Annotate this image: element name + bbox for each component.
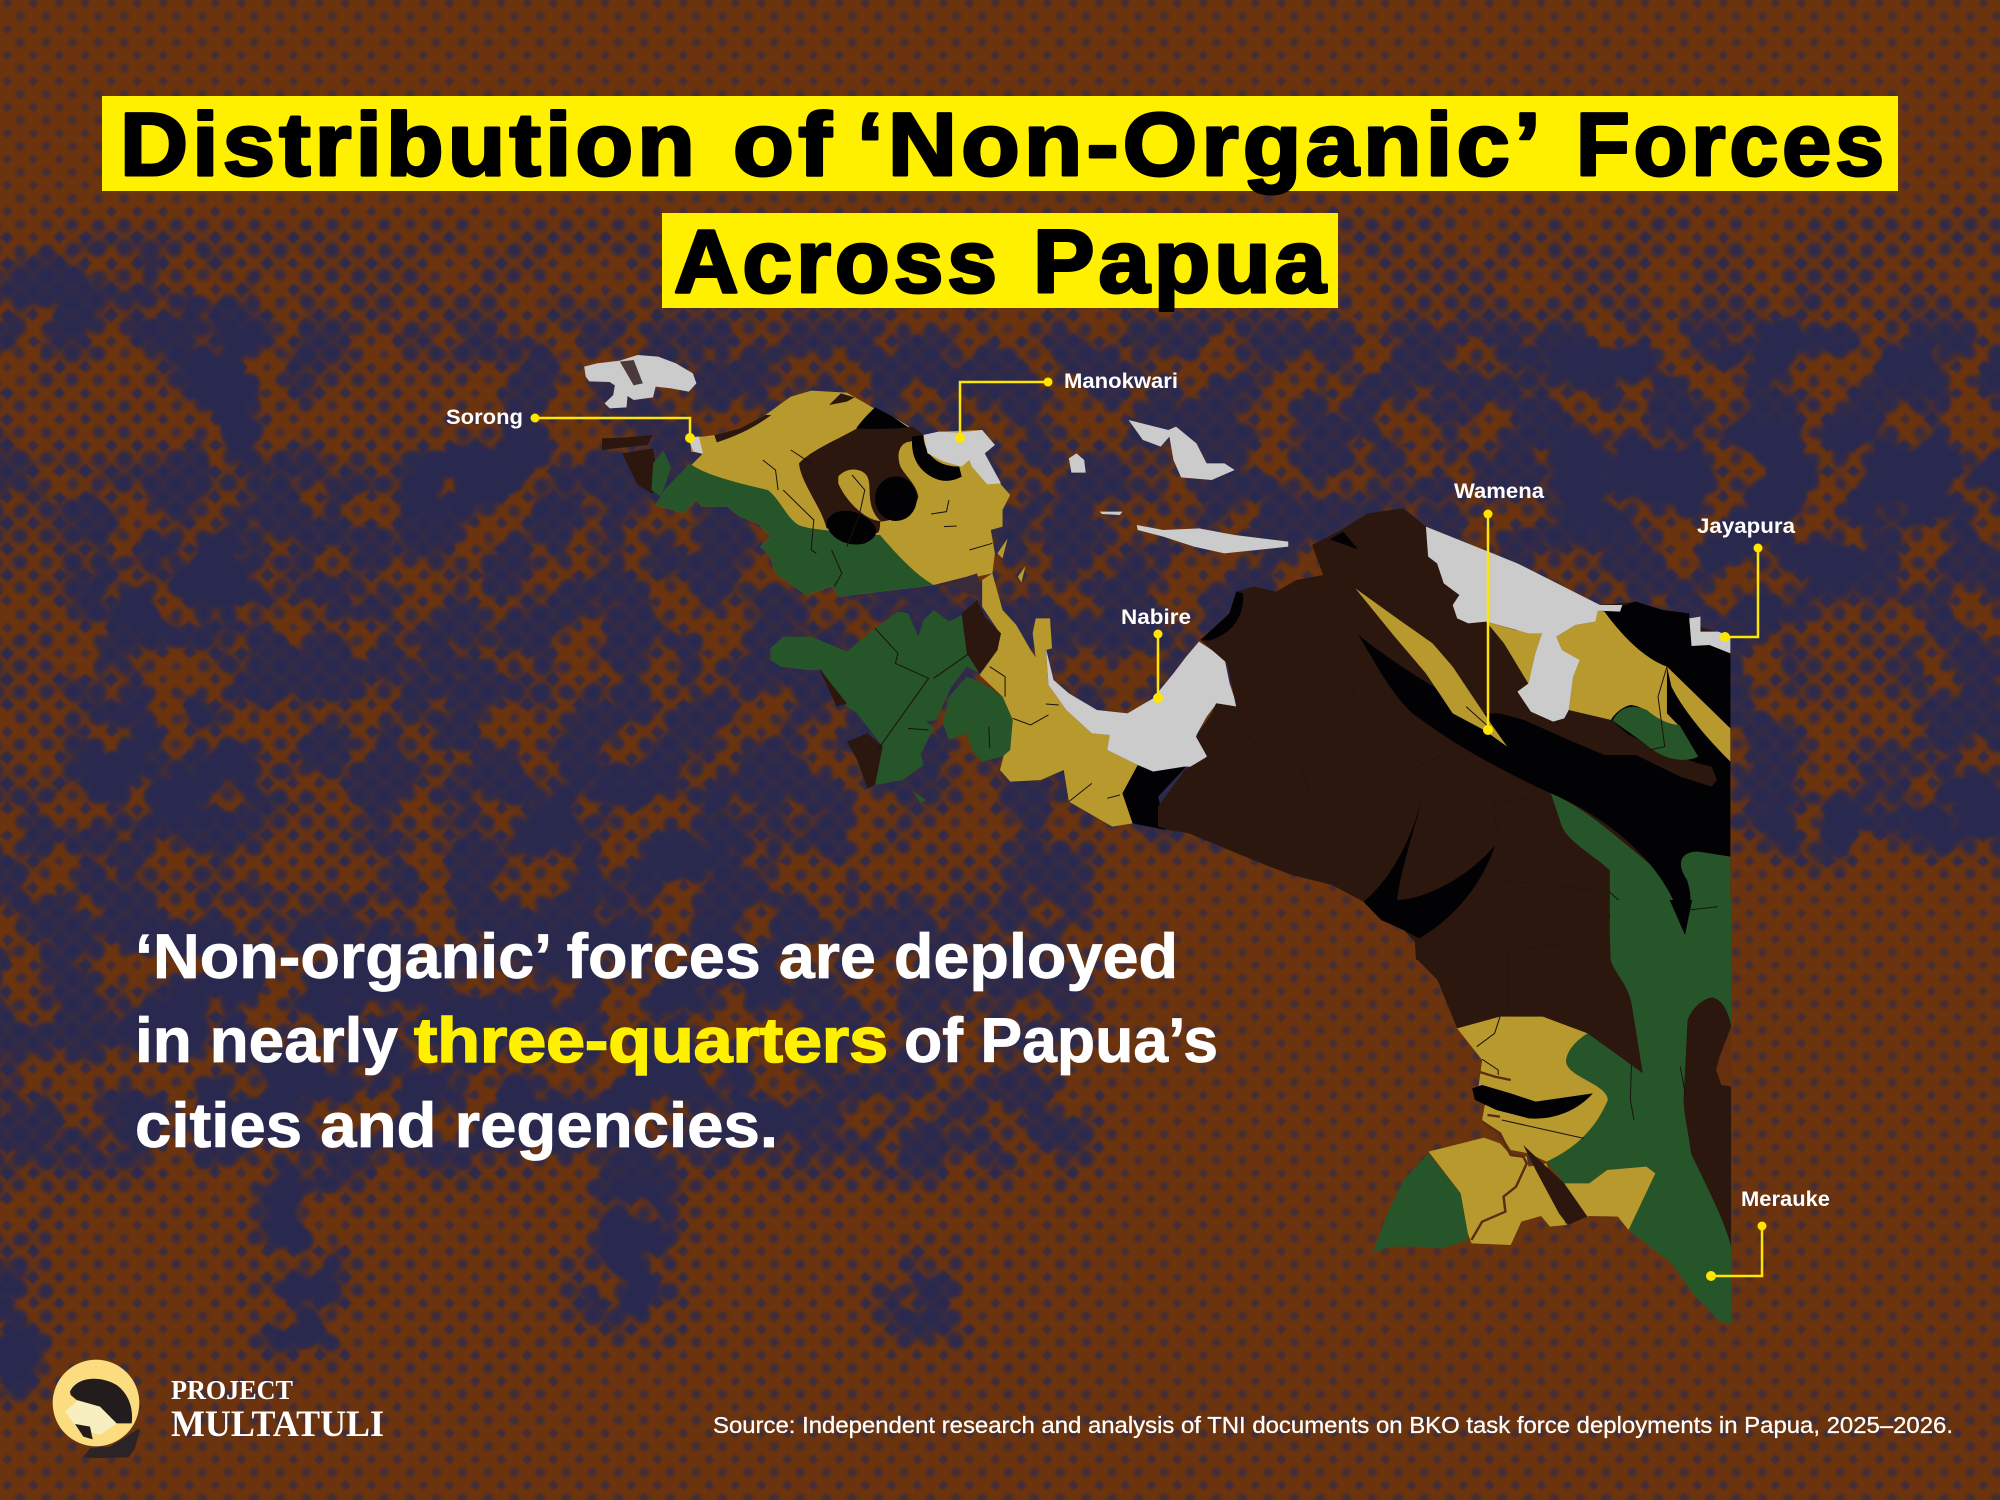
Sorong city (688, 437, 703, 454)
label: Jayapura (1697, 515, 1795, 642)
title line 2: Papua (1033, 211, 1330, 311)
label: Wamena: Wamena (1454, 480, 1544, 503)
neck brown (962, 600, 1001, 673)
black north tip (1330, 532, 1358, 549)
top small brown (829, 393, 855, 405)
boundary lines (763, 450, 1120, 802)
statement text: three-quarters (414, 1006, 888, 1076)
black below Nabire (1122, 765, 1186, 830)
coast brown (714, 415, 771, 442)
Bird's Head: green south (656, 463, 934, 597)
statement text: of Papua’s (904, 1006, 1218, 1076)
map of Papua (584, 355, 1732, 1323)
title line 1: of (733, 94, 836, 194)
statement text: in nearly (135, 1006, 398, 1076)
black coast crescent (1200, 592, 1243, 641)
label: Nabire (1121, 606, 1191, 703)
Kaimana green (943, 677, 1013, 762)
logo: Project Multatuli (53, 1360, 384, 1458)
label: Sorong: Sorong (446, 406, 523, 429)
Bay islands (1069, 420, 1288, 553)
logo wordmark (171, 1375, 384, 1445)
city labels (446, 370, 1830, 1281)
green left (1372, 1153, 1468, 1253)
south borders (1477, 907, 1718, 1138)
title line 2 (662, 211, 1338, 311)
Nabire grey (1046, 642, 1237, 772)
green south (1546, 900, 1731, 1323)
label: Manokwari: Manokwari (1064, 370, 1178, 393)
statement text (135, 922, 1218, 1161)
olive centre (1486, 622, 1542, 684)
internal borders (1234, 667, 1667, 917)
olive sliver (1667, 667, 1730, 762)
label: Wamena (1454, 480, 1544, 735)
olive left (1429, 1138, 1566, 1245)
olive right (1564, 1167, 1655, 1230)
Bird's Head: dark brown central (799, 427, 923, 533)
label: Sorong (446, 406, 695, 443)
brown stripe (1684, 997, 1731, 1247)
olive upper (1457, 1017, 1608, 1162)
title line 1: Distribution (120, 94, 699, 194)
black spike tip (1670, 900, 1692, 935)
Sorong islands (602, 435, 656, 494)
Fakfak green (770, 610, 980, 785)
river (1471, 1072, 1527, 1240)
source note: Source: Independent research and analysis of TNI documents on BKO task force deployments in Papua, 2025–2026. (713, 1412, 1953, 1438)
neck olive (980, 573, 1138, 827)
Jayapura grey (1689, 617, 1730, 653)
title (102, 94, 1898, 311)
Bird's Head base: olive (656, 391, 1010, 597)
bay scribble (934, 573, 982, 597)
olive finger (838, 470, 881, 521)
brown diagonal (1523, 1145, 1587, 1225)
title line 1: ‘Non-Organic’ (857, 94, 1545, 194)
map: main island north (1158, 508, 1730, 960)
label: Jayapura: Jayapura (1697, 515, 1795, 538)
olive north east (1556, 610, 1678, 725)
brown south (1415, 942, 1643, 1073)
Raja Ampat islands (584, 355, 696, 408)
logo wordmark: PROJECT (171, 1375, 293, 1405)
label: Manokwari (955, 370, 1178, 443)
edge notch (1716, 1025, 1732, 1087)
logo icon: portrait (53, 1360, 140, 1458)
title line 1: Forces (1576, 94, 1888, 194)
green south east (1551, 793, 1730, 960)
statement text: cities and regencies. (135, 1091, 778, 1161)
label: Nabire: Nabire (1121, 606, 1191, 629)
mainland base dark brown (1158, 508, 1730, 960)
map: west (Bird's Head, neck, Fakfak) (584, 355, 1288, 830)
label: Merauke: Merauke (1741, 1188, 1830, 1211)
black patches (827, 407, 962, 545)
logo wordmark: MULTATULI (171, 1404, 384, 1445)
Manokwari region (923, 430, 1001, 484)
olive lens (1355, 588, 1507, 747)
black crescent (1363, 792, 1495, 938)
black mouth (1472, 1085, 1593, 1119)
title line 2: Across (674, 211, 1001, 311)
black band (1358, 602, 1730, 935)
map: south (Merauke region) (1372, 900, 1732, 1323)
islet green (652, 451, 671, 497)
green north east (1613, 707, 1698, 760)
label: Merauke (1706, 1188, 1830, 1281)
Wamena grey (1426, 527, 1622, 722)
brown tongue (1493, 700, 1717, 787)
statement text: ‘Non-organic’ forces are deployed (135, 922, 1178, 992)
Fakfak brown coast (819, 668, 883, 788)
title line 1 (102, 94, 1898, 194)
